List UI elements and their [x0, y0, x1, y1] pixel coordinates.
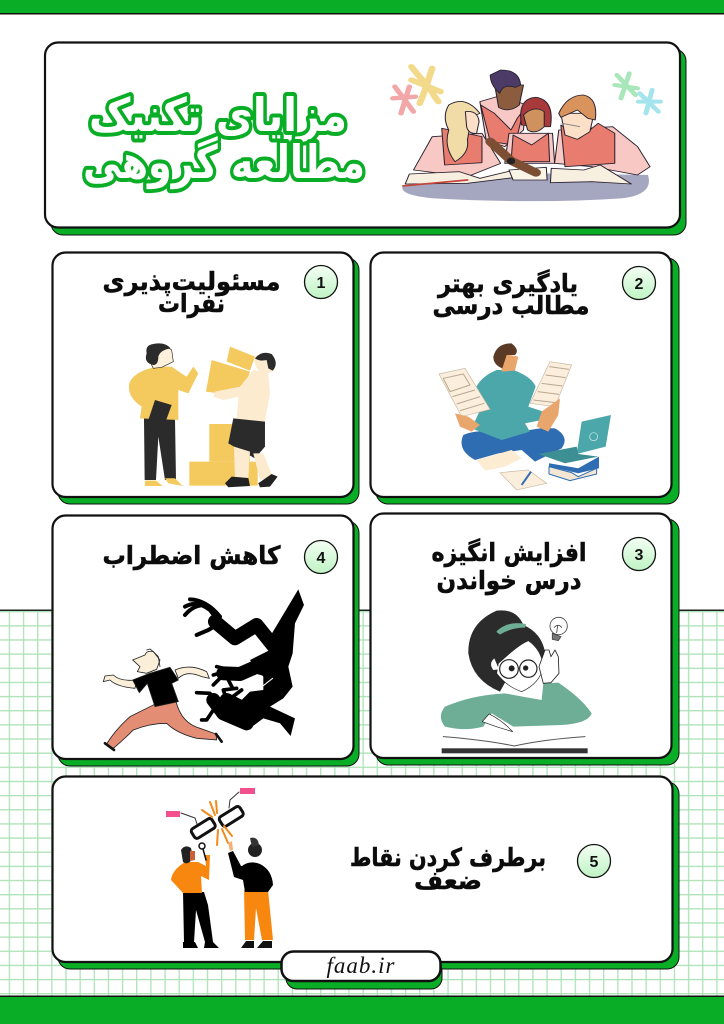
eyes: [509, 665, 528, 671]
icon: pink star: [393, 87, 416, 113]
books: [549, 457, 599, 473]
panel: 5 fixing weak points: [52, 776, 679, 969]
icon: green star: [615, 73, 638, 98]
illustration: student reading papers with laptop: [439, 343, 611, 490]
shadow monster: [185, 589, 304, 736]
books: [403, 165, 631, 186]
socks: [477, 450, 522, 471]
number badge 4: [304, 540, 338, 574]
panel: 4 reducing anxiety: [52, 516, 359, 766]
number badge 2: 2: [635, 276, 644, 293]
heading: برطرف کردن نقاط: [350, 843, 546, 873]
website pill: faab.ir: [327, 953, 396, 978]
panel: header: [45, 42, 686, 235]
man with shorts: [213, 353, 278, 487]
running man: [103, 649, 222, 750]
student on the left: [414, 101, 501, 177]
heading: مطالب درسی: [432, 291, 590, 320]
sleeve cuff: [482, 714, 513, 732]
person pointing up: [228, 838, 273, 948]
heading: مسئولیت‌پذیری: [102, 267, 280, 297]
idea bulb: [550, 617, 567, 641]
number badge 1: [304, 266, 338, 298]
face: [497, 641, 543, 692]
heading: یادگیری بهتر: [436, 269, 578, 299]
number badge 3: 3: [635, 547, 644, 564]
number badge 3: [622, 538, 656, 570]
sparks: [202, 801, 232, 845]
website pill: [282, 952, 442, 989]
illustration: shadow monster chasing runner: [103, 589, 304, 750]
icon: blue star: [638, 90, 660, 113]
open book: [443, 737, 585, 746]
student at the back: [480, 70, 526, 147]
heading: کاهش اضطراب: [102, 541, 281, 571]
heading: [350, 843, 546, 895]
top green band: [0, 0, 724, 14]
icon: yellow star: [411, 67, 440, 103]
body: [441, 683, 592, 729]
heading: درس خواندن: [436, 566, 582, 596]
person with magnifier: [171, 843, 219, 948]
left paper: [439, 368, 490, 417]
wristwatch: [507, 158, 515, 164]
student in the middle: [505, 97, 555, 163]
panel: 3 motivation to study: [370, 514, 679, 765]
heading: [432, 538, 586, 596]
face and hair: [502, 353, 518, 372]
hands: [455, 398, 560, 432]
title: مطالعه گروهی: [83, 135, 365, 189]
hand: [539, 650, 559, 683]
student on the right: [555, 95, 650, 175]
right paper: [530, 362, 572, 407]
laptop: [577, 415, 611, 454]
boxes: [189, 347, 258, 486]
number badge 2: [622, 266, 656, 300]
panel: 2 better learning: [370, 252, 679, 504]
panel: 1 team responsibility: [52, 252, 359, 504]
number badge 5: 5: [590, 854, 599, 871]
heading: [432, 269, 590, 320]
table: [402, 173, 649, 201]
heading: افزایش انگیزه: [432, 538, 586, 568]
number badge 1: 1: [317, 275, 326, 292]
title: [83, 88, 365, 189]
illustration: girl with glasses and idea bulb: [441, 610, 592, 753]
heading: [102, 267, 280, 319]
heading: نفرات: [158, 289, 225, 319]
torso: [472, 370, 543, 440]
title: مزایای تکنیک: [89, 88, 347, 142]
headband: [498, 624, 525, 633]
legs: [462, 428, 565, 462]
illustration: carrying boxes: [129, 343, 278, 487]
number badge 4: 4: [317, 550, 326, 567]
glasses: [500, 660, 537, 678]
illustration: broken chain with two people: [166, 788, 273, 948]
heading: ضعف: [414, 866, 482, 895]
broken chain: [190, 805, 244, 839]
bottom green band: [0, 996, 724, 1024]
number badge 5: [578, 844, 610, 878]
illustration: students studying together: [393, 67, 660, 201]
pointing arm: [490, 142, 536, 173]
hair: [468, 610, 546, 692]
woman in yellow sweater: [129, 343, 198, 486]
pink tags: [166, 788, 255, 824]
loose paper and pen: [500, 470, 547, 490]
